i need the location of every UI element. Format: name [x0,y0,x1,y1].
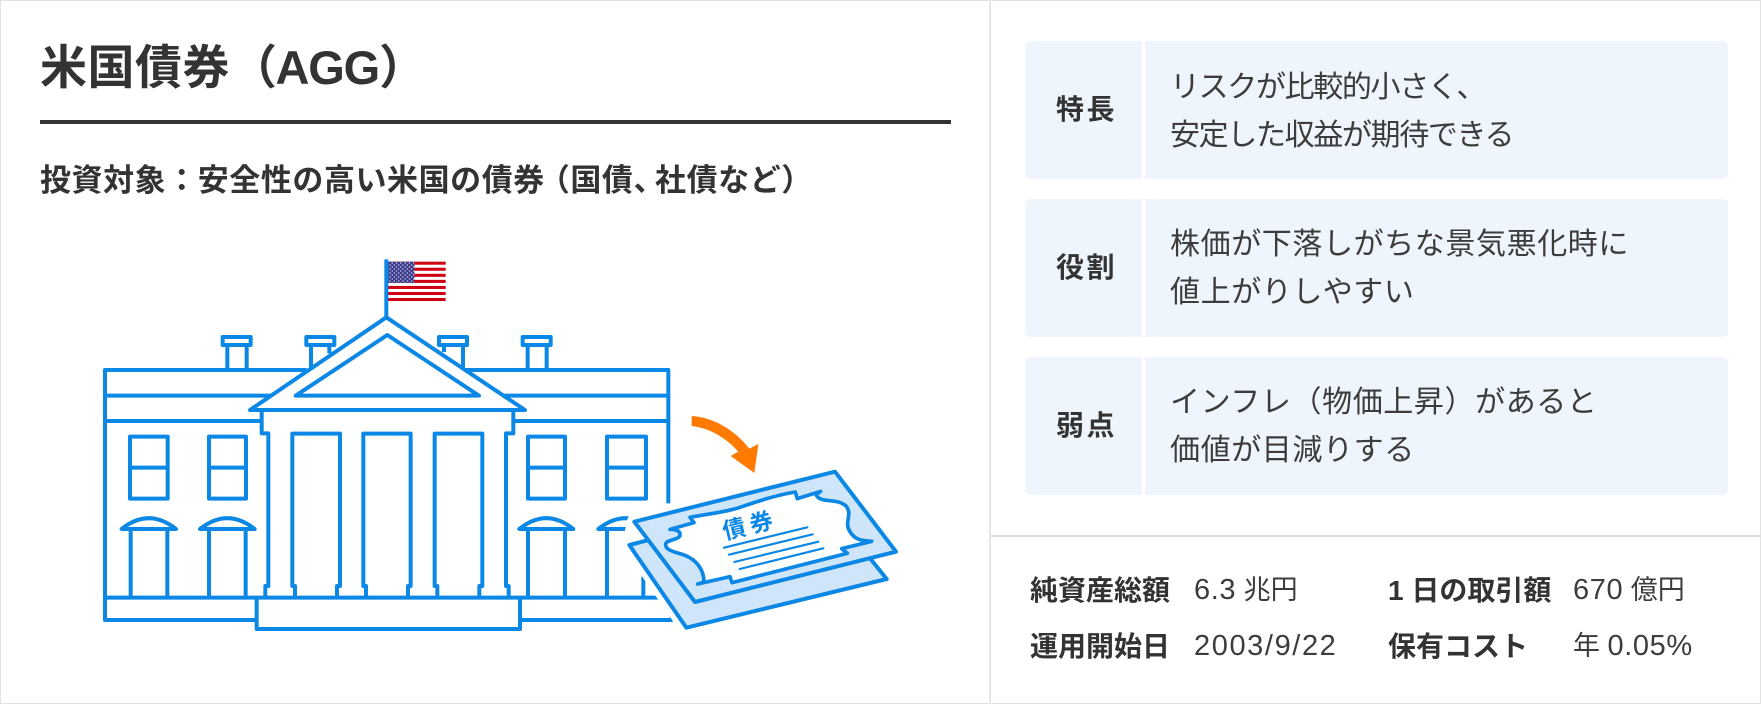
stat: inception date: 運用開始日 [1030,631,1170,662]
role text [1170,228,1629,309]
label: weakness: 弱点 [1056,410,1117,441]
role text: 値上がりしやすい [1170,276,1414,309]
base and steps [105,592,670,604]
illustration: white house and bonds [103,259,898,631]
bond lines [724,527,823,569]
chimneys [223,337,551,368]
windows [130,437,646,499]
pediment [250,317,525,410]
stat: holding cost: 保有コスト [1388,631,1528,662]
investment target text: 投資対象：安全性の高い米国の債券（国債、社債など） [40,163,813,198]
panel: role [1025,199,1728,337]
entablature and columns [262,410,513,598]
panel: weakness [1025,357,1728,495]
white halo [629,472,896,628]
weakness text: 価値が目減りする [1170,434,1415,467]
front sheet [634,472,896,602]
arrow [692,416,758,473]
text: 2003/9/22 [1194,630,1337,662]
stat: net assets: 純資産総額 [1030,575,1170,606]
flag pole [380,259,392,317]
text: 6.3 兆円 [1194,574,1298,606]
features text: リスクが比較的小さく、 [1170,71,1485,104]
panel: features [1025,41,1728,179]
flag [388,262,446,301]
features text: 安定した収益が期待できる [1170,119,1513,152]
panel divider [989,0,991,704]
stat: daily volume: 1 日の取引額 [1388,575,1551,606]
weakness text [1170,386,1598,467]
bond certificates [629,472,896,628]
label: features: 特長 [1056,94,1117,125]
title: 米国債券（AGG） [40,41,426,94]
doors [131,529,643,598]
label: role: 役割 [1056,252,1117,283]
ticket [666,491,872,584]
text: 年 0.05% [1573,630,1693,662]
role text: 株価が下落しがちな景気悪化時に [1170,228,1629,261]
back sheet [629,527,887,628]
text: 670 億円 [1573,574,1685,606]
title rule [40,120,951,124]
right wall [465,370,668,503]
roof and walls [105,370,307,620]
features text [1170,71,1513,152]
bond label: 債券 [720,506,780,545]
building [105,259,672,629]
weakness text: インフレ（物価上昇）があると [1170,386,1598,419]
